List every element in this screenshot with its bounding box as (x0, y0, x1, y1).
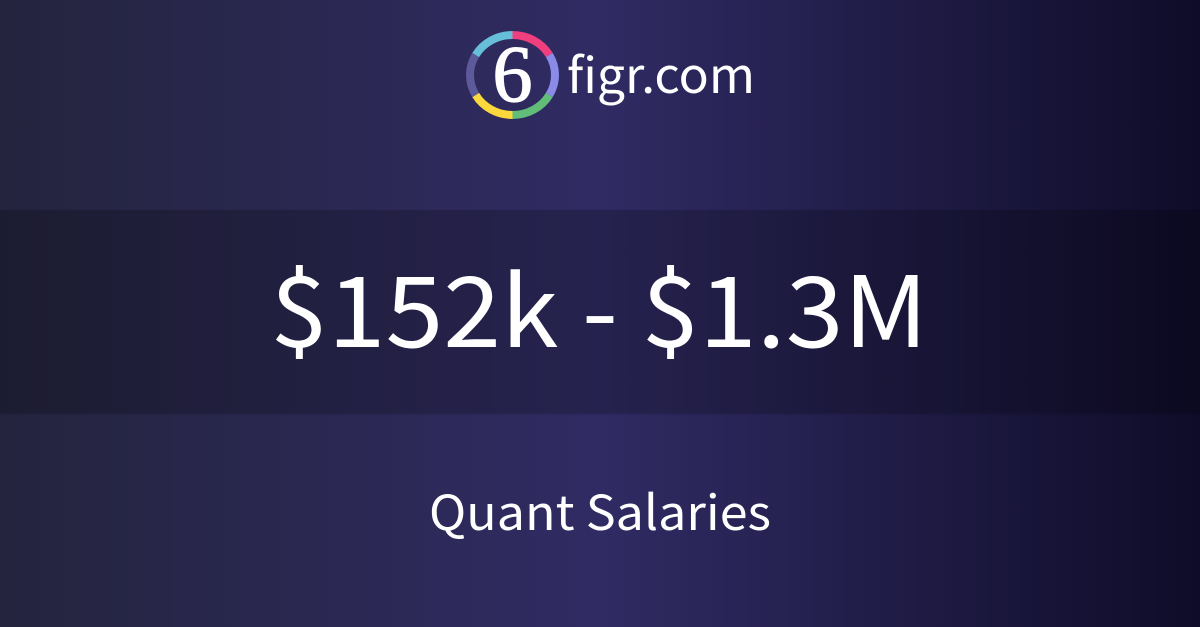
icon: numeral six: 6 (492, 31, 532, 119)
salary range heading: $152k - $1.3M (270, 234, 928, 376)
logo (470, 31, 755, 119)
salary band (0, 210, 1200, 413)
logo wordmark: figr.com (567, 37, 755, 108)
icon: segmented ring (470, 35, 555, 115)
job title: Quant Salaries (429, 474, 771, 544)
